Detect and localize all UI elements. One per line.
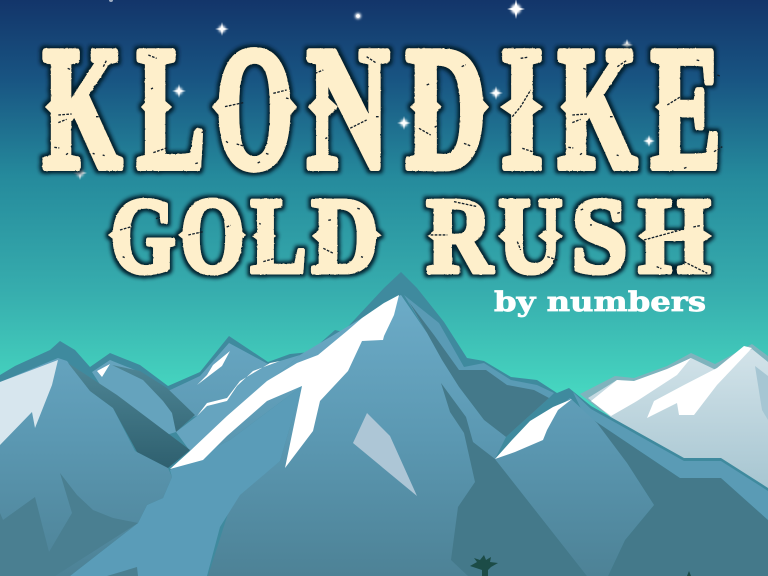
upper left slope fill [176, 355, 300, 451]
right mountain [495, 398, 654, 576]
left mountain [0, 358, 190, 576]
secondary snow streak [197, 361, 280, 416]
title: Gold Rush: L [250, 177, 306, 296]
marks left half [54, 55, 379, 262]
title: Gold Rush: O [180, 177, 244, 296]
second back peak [92, 360, 195, 440]
stars [73, 0, 655, 180]
left snow [0, 360, 58, 445]
right mountain band [573, 392, 768, 520]
title: Klondike: O [216, 11, 293, 205]
main mountain light ridge band [404, 295, 554, 437]
left lower shadow [0, 473, 138, 576]
title: Gold Rush: D [312, 177, 378, 296]
marks right half [419, 57, 722, 273]
title: Klondike [43, 11, 721, 205]
title: Klondike: E [651, 11, 721, 205]
title: Gold Rush: U [498, 177, 562, 296]
main peak snow [170, 295, 399, 469]
bottom patch [107, 567, 138, 576]
tree left [470, 555, 498, 576]
title: Klondike: L [137, 11, 205, 205]
small back peak [168, 343, 268, 420]
title: Gold Rush: G [110, 177, 176, 296]
distressed letter marks [54, 55, 722, 273]
title: Klondike: I [501, 11, 543, 205]
mountain range [0, 272, 768, 576]
title: Klondike: K [558, 11, 637, 205]
tree right [687, 571, 691, 576]
title: Gold Rush: H [638, 177, 710, 296]
trees [470, 555, 691, 576]
title: Gold Rush: R [426, 177, 493, 296]
right side shadow [441, 383, 587, 576]
main mountain back shadow [409, 302, 549, 437]
title: Gold Rush: S [572, 177, 628, 296]
title: Klondike: N [307, 11, 389, 205]
snow patch [353, 413, 417, 496]
far right light mountain [580, 344, 768, 510]
right mountain snow [495, 399, 572, 459]
title: Klondike: K [43, 11, 122, 205]
left slope lower stream [70, 386, 302, 576]
main mountain [170, 295, 587, 576]
subtitle: by numbers: by numbers [494, 287, 706, 318]
back ridge silhouette [0, 272, 768, 576]
title: Gold Rush [108, 177, 712, 296]
title: Klondike: D [406, 11, 486, 205]
right mountain dark face [583, 413, 768, 576]
peak snow [197, 351, 230, 385]
